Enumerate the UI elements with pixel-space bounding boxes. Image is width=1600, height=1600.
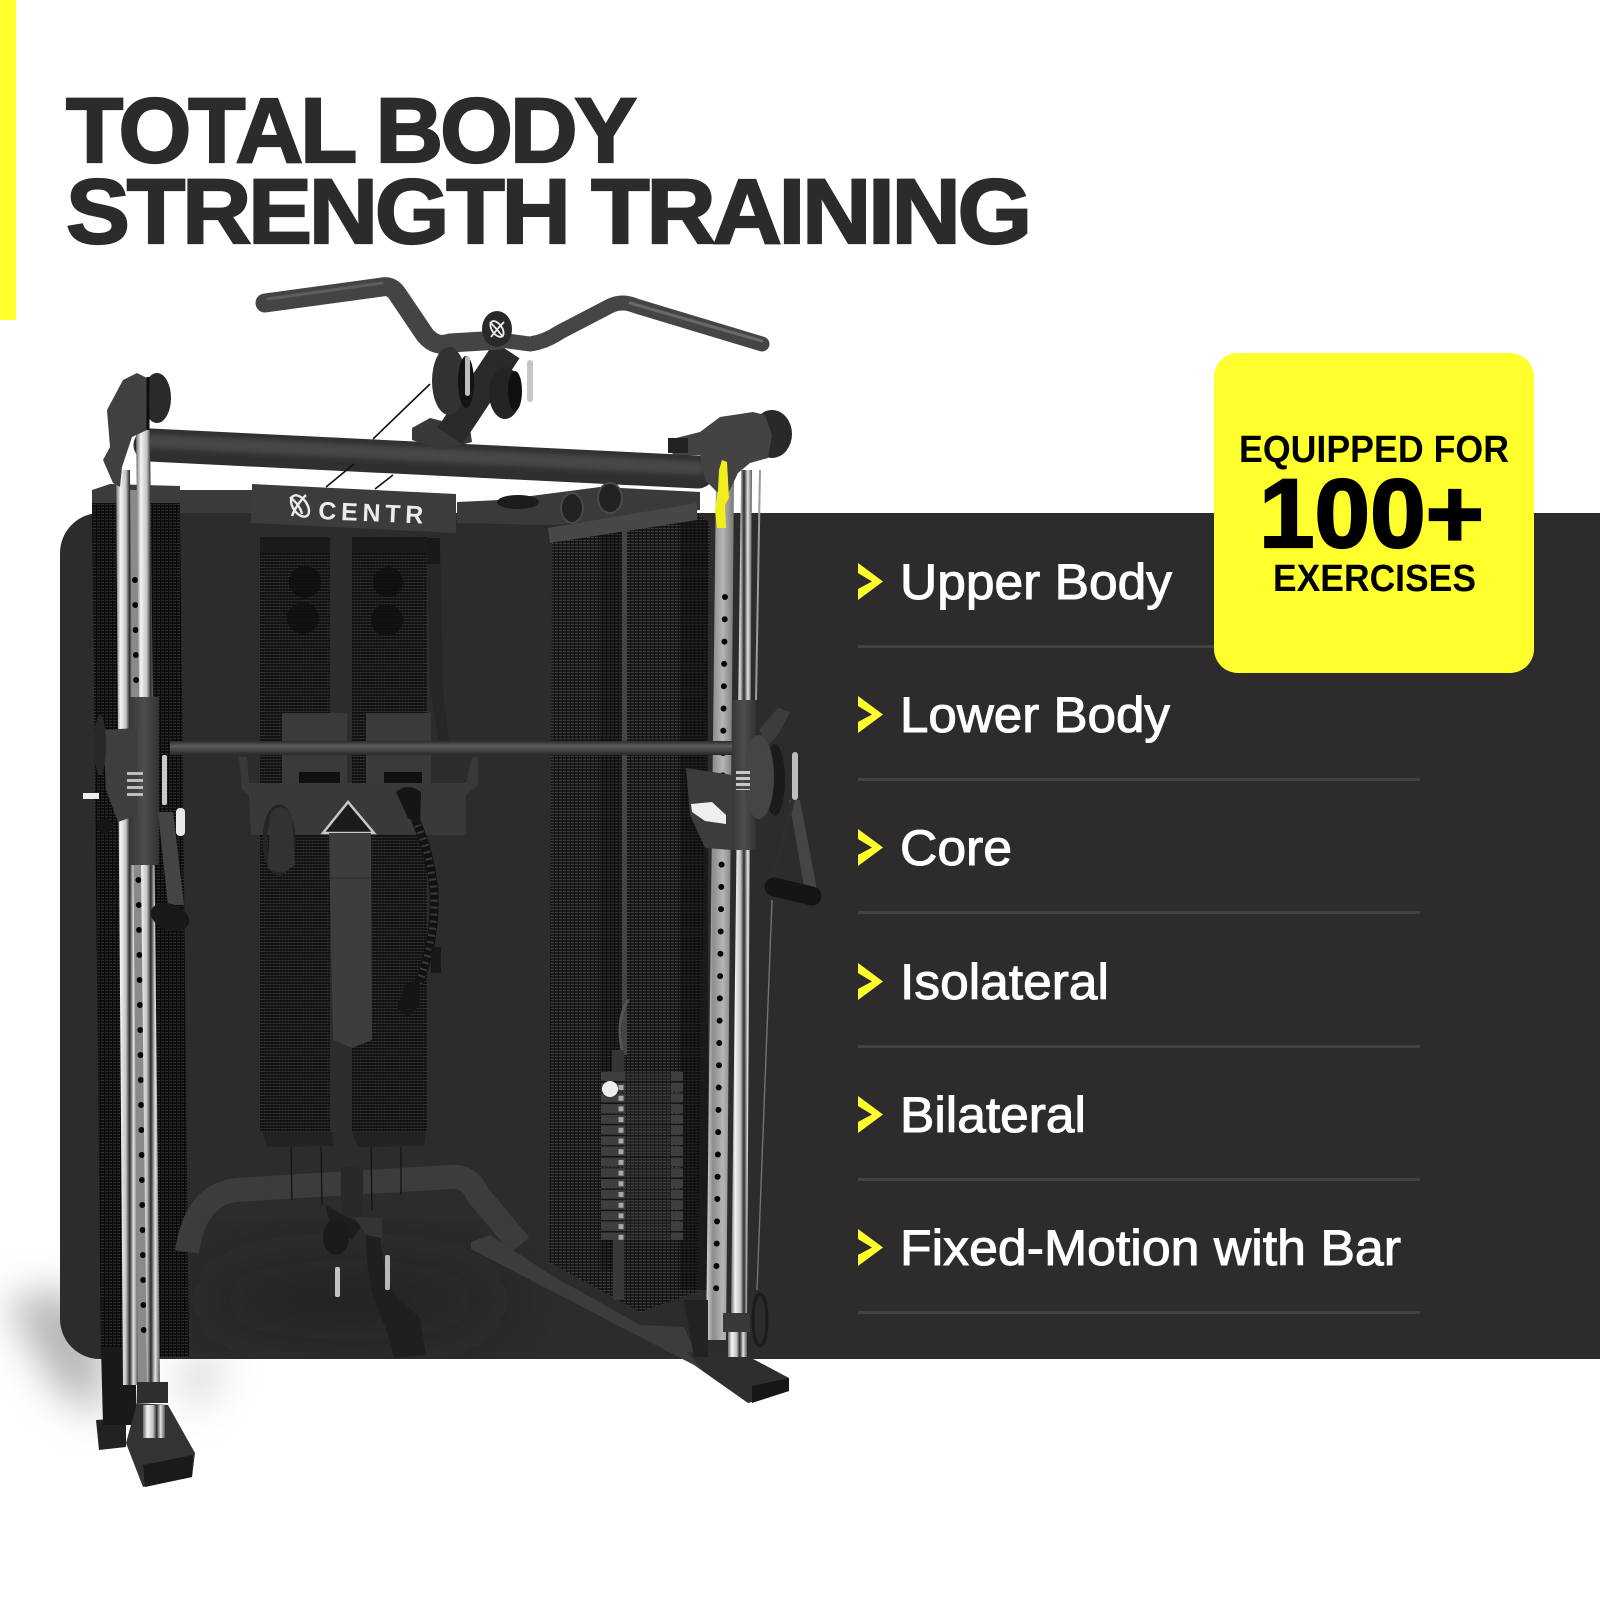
flat pulley: [497, 495, 539, 509]
left perforated plate: [128, 490, 152, 1382]
left tower bottom frame: [101, 1347, 137, 1425]
list: Bilateral: Bilateral: [900, 1087, 1086, 1143]
left base foot: [126, 1403, 195, 1487]
right base foot: [687, 1352, 789, 1403]
title: STRENGTH TRAINING: [66, 161, 1029, 263]
right top pulley: [668, 410, 792, 500]
crossbar: [150, 441, 698, 472]
left weight shroud: [92, 503, 189, 1357]
left chrome strip: [116, 470, 138, 1385]
left holes: [135, 580, 144, 1350]
long strap with triangle handle: [323, 802, 374, 1048]
base arch: [187, 1177, 520, 1252]
list: Lower Body: Lower Body: [900, 687, 1170, 743]
left chrome rod: [136, 430, 160, 1385]
left shroud cap: [92, 484, 180, 503]
functional trainer machine: [83, 283, 817, 1487]
curved shroud strip: [548, 503, 697, 543]
left cable handle: [147, 755, 193, 936]
callout: equipped for 100+ exercises: EQUIPPED FOR: [1239, 429, 1509, 471]
right perforated plate: [706, 480, 734, 1340]
title: TOTAL BODY: [66, 80, 636, 182]
callout: equipped for 100+ exercises: EXERCISES: [1273, 558, 1476, 600]
lat bar pulleys: [432, 347, 533, 419]
right weight shroud: [549, 515, 710, 1312]
left rod collar: [137, 1382, 168, 1403]
lat bar logo hub: [482, 311, 512, 347]
guide pulleys: [561, 483, 622, 523]
list: Isolateral: Isolateral: [900, 954, 1109, 1010]
left top pulley: [103, 373, 171, 487]
lat bar mount: [412, 350, 507, 450]
right carriage: [686, 700, 790, 850]
left rear foot: [96, 1418, 126, 1450]
upper frame bar: [180, 487, 700, 525]
list: Fixed-Motion with Bar: Fixed-Motion with Bar: [900, 1220, 1401, 1276]
right base beam: [471, 1235, 704, 1372]
rope attachment: [396, 787, 441, 1017]
overhead cables: [326, 384, 430, 489]
dark panel: [60, 513, 1600, 1359]
center cables: [291, 1147, 401, 1210]
interior floor shade: [324, 1294, 375, 1306]
list: Core: Core: [900, 820, 1012, 876]
right thin cables: [756, 470, 772, 1290]
floor shadow: [5, 1290, 225, 1420]
title: [66, 80, 1029, 263]
strap loop: [265, 807, 295, 873]
right holes: [716, 597, 725, 1300]
list dividers: [858, 645, 1420, 1314]
lat bar: [265, 283, 762, 344]
horizontal pull-up bar: [170, 741, 732, 755]
center column: [335, 535, 450, 1205]
center mesh covers: [260, 537, 427, 1147]
yellow hook: [715, 460, 729, 528]
weight stack: [602, 1000, 671, 1300]
accessory rack: [239, 757, 478, 835]
right chrome rod: [731, 470, 752, 1315]
list: Upper Body: Upper Body: [900, 554, 1172, 610]
center post and pedal: [323, 1167, 426, 1358]
callout: equipped for 100+ exercises: 100+: [1259, 459, 1484, 568]
nameplate: CENTR: [318, 497, 424, 530]
left carriage: [83, 697, 159, 865]
nameplate: [251, 484, 456, 533]
accessory plates: [282, 713, 431, 785]
callout: equipped for 100+ exercises: [1214, 353, 1534, 673]
yellow accent bar: [0, 0, 16, 320]
right base collar and chrome: [684, 1294, 767, 1357]
right cable handle: [772, 752, 817, 896]
